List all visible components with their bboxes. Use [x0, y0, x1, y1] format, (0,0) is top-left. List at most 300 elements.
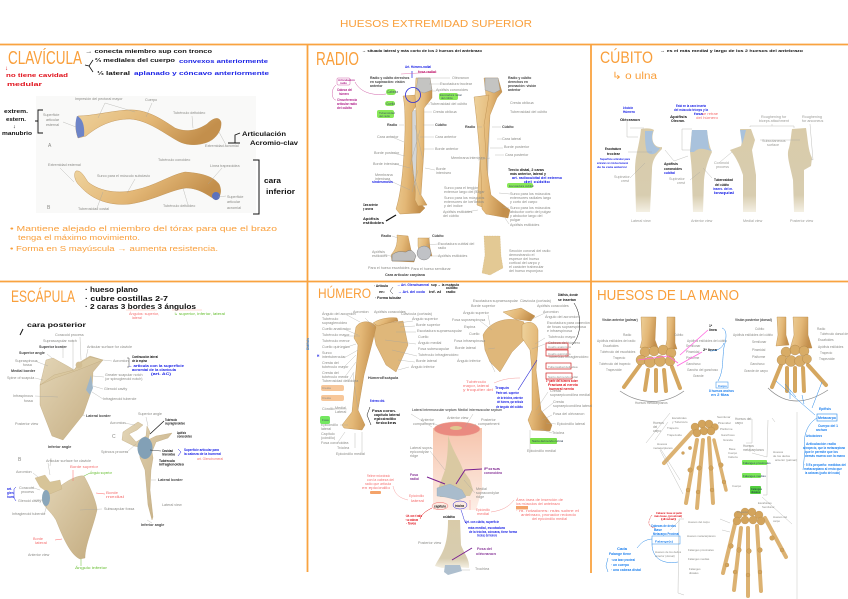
annotations: mano: Articulaciones: [806, 434, 822, 438]
annotations: húmero: · m. rotadores: más sobre el: [516, 508, 579, 513]
labels: mano: Radio: [623, 333, 632, 337]
bone: escápula anterior: [35, 475, 97, 559]
note: cara posterior: cara posterior: [27, 322, 87, 329]
annotations: húmero: tróclea: [455, 504, 464, 508]
labels: clavícula: B: [47, 205, 51, 211]
annotations: radio: [332, 65, 563, 225]
labels: escápula: Infraglenoid tubercle: [103, 397, 136, 401]
annotations: mano: línea: [709, 328, 717, 332]
labels: radio: Cara articular carpiana: [385, 273, 426, 277]
annotations: húmero: en epicóndilo: [362, 486, 390, 490]
annotations: húmero: epicóndilo: [374, 417, 397, 421]
annotations: húmero: Cuello anatómico: [548, 345, 572, 349]
labels: húmero: (cóndilo): [321, 436, 335, 440]
annotations: cúbito: Olecran.: [671, 118, 685, 123]
bones: húmero posterior y escápula: [483, 308, 552, 431]
labels: escápula: Inferior angle: [48, 445, 71, 449]
labels: mano: Semilunar: [752, 340, 767, 344]
annotations: mano: anchura: [816, 428, 827, 432]
annotations: radio: fosa radial: [418, 70, 436, 74]
labels: cúbito: Supinator: [614, 175, 631, 179]
labels: húmero: Cresta del: [322, 361, 339, 365]
labels: mano: Trapecio: [613, 356, 626, 360]
labels: mano: Pisiforme: [752, 355, 766, 359]
labels: húmero: Ángulo inferior: [457, 359, 482, 363]
labels: radio: Membrana interósea: [451, 156, 486, 160]
labels: mano: Huesos: [657, 442, 668, 446]
labels: clavícula: Extremidad acromial: [205, 144, 239, 148]
labels: cúbito: crest: [677, 181, 685, 185]
annotations: húmero: cúbito: [443, 515, 455, 519]
annotations: mano: 8 huesos anchos: [709, 389, 734, 393]
annotations: húmero: tróclea: [376, 421, 397, 425]
labels: escápula: Lateral border: [158, 478, 183, 482]
labels: escápula: Subscapular fossa: [104, 507, 135, 511]
labels: radio: Tuberosidad del cúbito: [510, 110, 547, 114]
annotations: escápula: glen: [7, 491, 14, 495]
labels: húmero: Escotadura supraescapular: [417, 329, 463, 333]
labels: radio: Para el hueso semilunar: [411, 267, 452, 271]
labels: húmero: Epicóndilo lateral: [557, 422, 585, 426]
notes: clavícula top: convexos anteriormente: [179, 59, 268, 65]
annotations: mano: [606, 324, 846, 572]
labels: mano: Falanges medias: [688, 557, 710, 561]
notes: clavícula orange: tenga el máximo movimiento.: [18, 235, 140, 242]
annotations: escápula: → articula con la superficie: [128, 364, 184, 368]
labels: clavícula: Extremidad esternal: [48, 163, 81, 167]
labels: radio: Cara lateral: [502, 137, 521, 141]
figure: mano dorsal: [723, 508, 786, 596]
labels: radio: Borde interóseo: [373, 162, 399, 166]
labels: mano: Trapezoide: [667, 433, 682, 437]
labels: mano: [597, 318, 848, 595]
notes: clavícula top: [85, 49, 269, 77]
annotations: húmero: Fosa: [322, 418, 329, 422]
annotations: mano: metacarpiano al resto que: [804, 467, 842, 471]
labels: radio: Apófisis estiloides: [438, 254, 467, 258]
labels: húmero: Acromion: [353, 310, 369, 314]
notes: escápula top: · 2 caras 3 bordes 3 ángulos: [85, 304, 196, 311]
labels: clavícula: Tubérculo deltoideo: [163, 204, 195, 208]
labels: escápula: Lateral border: [86, 414, 111, 418]
labels: húmero: Cuello anatómico: [322, 327, 350, 331]
labels: radio: Borde posterior: [504, 145, 530, 149]
annotations: radio: Cuello: [386, 102, 395, 106]
annotations: húmero: los músculos del antebrazo: [516, 501, 560, 506]
bone: clavícula A: [76, 110, 221, 145]
annotations: cúbito: Húmero: [623, 110, 635, 114]
annotations: escápula: [7, 354, 223, 570]
annotations: mano: · 5 Es pequeño: medidas del: [804, 463, 846, 467]
labels: cúbito: Roughening: [802, 115, 822, 119]
labels: cúbito: Anterior view: [691, 219, 713, 223]
labels: radio: y abductor largo del: [510, 214, 543, 218]
labels: cúbito: Subcutaneous: [762, 139, 786, 143]
labels: mano: Escafoides: [818, 338, 834, 342]
labels: radio: Apófisis estiloides: [510, 223, 539, 227]
labels: radio: Apófisis coronoides: [436, 88, 468, 92]
labels: clavícula: Línea trapezoidea: [210, 164, 240, 168]
subheading: o ulna: ↳ o ulna: [612, 71, 658, 82]
annotations: mano: Falanges medias: [743, 474, 766, 478]
labels: escápula: Acromion: [16, 470, 32, 474]
annotations: escápula: Tubérculo: [159, 459, 175, 463]
labels: radio: del hueso esponjoso: [509, 269, 543, 273]
labels: mano: Trapecio: [667, 426, 679, 430]
labels: radio: Cúbito: [502, 125, 514, 129]
labels: cúbito: process: [716, 165, 729, 169]
labels: radio: Sección coronal del radio: [509, 249, 550, 253]
annotations: húmero: Extremo dist.: [370, 399, 385, 403]
labels: mano: Trapezoide: [606, 368, 622, 372]
figure: sección del brazo y codo: [433, 422, 482, 510]
labels: húmero: Medial: [476, 487, 487, 491]
labels: escápula: Supraspinous: [15, 359, 38, 363]
labels: mano: Falanges: [689, 567, 701, 571]
annotations: clavícula black: inferior: [266, 189, 295, 196]
labels: radio: radio: [438, 246, 446, 250]
labels: húmero: Apófisis coracoides: [537, 304, 569, 308]
labels: mano: Trapecio: [737, 510, 748, 514]
annotations: húmero: Fosa: [484, 466, 501, 471]
labels: radio: Olécranon: [452, 76, 469, 80]
annotations: mano: la cabezas (puño del nudo): [805, 471, 840, 475]
labels: húmero: Apófisis coracoides: [374, 310, 406, 314]
figure background: clavícula: [36, 96, 256, 213]
notes: húmero top: · Forma tubular: [375, 295, 401, 300]
labels: húmero: Espina: [464, 325, 476, 329]
labels: húmero: Epicóndilo medial: [527, 449, 556, 453]
labels: húmero: Borde superior: [416, 323, 441, 327]
labels: escápula: Posterior view: [15, 422, 38, 426]
labels: cúbito: Medial view: [743, 219, 763, 223]
annotations: escápula: Borde: [106, 490, 118, 495]
labels: cúbito: Lateral view: [631, 219, 651, 223]
labels: mano: Semilunar: [686, 344, 701, 348]
notes: escápula top: Ángulos: superior,: [129, 312, 159, 316]
labels: escápula: Acromion: [113, 359, 129, 363]
notes: húmero top: → Art. Glenohumeral: [397, 283, 429, 287]
annotations: mano: en 2 filas: [711, 393, 729, 397]
labels: mano: Escafoides: [758, 501, 772, 505]
annotations: escápula: lateral: [35, 540, 47, 545]
annotations: escápula: de la espina: [132, 358, 148, 363]
annotations: clavícula black: extrem.: [4, 109, 29, 115]
labels: mano: Escafoides: [603, 344, 619, 348]
annotations: húmero: Surco del nervio radial: [548, 375, 578, 379]
labels: cúbito: Roughening for: [761, 115, 787, 119]
annotations: radio: Escotadura radial: [440, 93, 462, 97]
labels: radio: Cara anterior: [435, 135, 457, 139]
annotations: cúbito: fosa: [694, 112, 703, 116]
heading: húmero: HÚMERO: [318, 285, 371, 301]
annotations: radio: y convexa: [363, 206, 373, 211]
annotations: húmero: Surco del nervio cubital: [532, 439, 564, 443]
labels: clavícula: Superficie: [227, 195, 243, 199]
labels: mano: Cabeza: [728, 455, 738, 459]
annotations: escápula: Superficie articular para: [184, 448, 219, 452]
annotations: mano: 1ª: [709, 324, 713, 328]
panel: clavícula: [2, 48, 299, 253]
notes: clavícula orange: [10, 226, 277, 253]
annotations: mano: Base: [654, 528, 662, 532]
annotations: cúbito: Apófisis: [664, 161, 678, 166]
annotations: húmero: Cuello quirúrgico: [548, 352, 571, 356]
annotations: húmero: del epicóndilo medial: [532, 516, 567, 521]
notes: húmero top: inf. al: [429, 289, 441, 294]
labels: escápula: C: [112, 434, 116, 440]
annotations: radio: Art. Húmero-radial: [405, 65, 431, 69]
annotations: mano: (distal): [661, 517, 676, 521]
labels: escápula: Superior angle: [138, 412, 162, 416]
annotations: mano: · un cuerpo: [611, 563, 629, 567]
labels: húmero: supraepicondílea lateral: [553, 404, 592, 408]
labels: cúbito: crest: [621, 179, 629, 183]
notes: clavícula top: ⅔ mediales del cuerpo: [95, 58, 176, 64]
notes: húmero top: radio: [446, 289, 456, 294]
labels: escápula: Articular surface for clavicle: [46, 459, 91, 463]
labels: húmero: Borde lateral: [416, 359, 437, 363]
labels: mano: Huesos: [653, 421, 664, 425]
labels: radio: abductor corto del pulgar: [510, 210, 552, 214]
note: no tiene cavidad medular: medular: [7, 82, 43, 88]
figure: muñeca dorsal: [768, 317, 828, 401]
labels: mano: Huesos: [743, 444, 754, 448]
annotations: húmero: Área ósea de inserción de: [516, 497, 563, 502]
labels: mano: carpo: [773, 519, 780, 523]
labels: húmero: Cresta del: [322, 371, 339, 375]
annotations: húmero: radio que articula: [365, 482, 391, 486]
labels: radio: Borde anterior: [435, 147, 459, 151]
labels: húmero: ridge: [476, 495, 484, 499]
annotations: radio: Apófisis: [363, 216, 379, 221]
annotations: escápula: Cavidad: [162, 449, 173, 453]
annotations: cúbito: Tuberosidad: [714, 177, 734, 182]
labels: húmero: Escápula: [382, 376, 399, 380]
labels: mano: Trapezoide: [819, 357, 835, 361]
annotations: radio: Cabeza del: [337, 88, 352, 92]
labels: clavícula: articular: [46, 118, 60, 122]
labels: mano: Piramidal: [752, 348, 766, 352]
annotations: mano: Falanges proximales: [743, 461, 771, 465]
labels: radio: Para el hueso escafoides: [368, 266, 410, 270]
labels: radio: Radio: [381, 234, 392, 238]
labels: escápula: Acromion: [110, 421, 126, 425]
labels: mano: Visión posterior (dorsal): [735, 318, 772, 322]
labels: mano: Radio: [817, 327, 826, 331]
bone: clavícula B: [75, 171, 221, 204]
labels: mano: Cuerpo: [732, 484, 742, 488]
notes: húmero top: [374, 282, 460, 300]
labels: escápula: Glenoid cavity: [104, 387, 127, 391]
notes: escápula top: [85, 287, 225, 320]
annotations: radio: Cara anterior: [363, 202, 378, 207]
labels: húmero: [321, 299, 592, 571]
annotations: radio: art. radiocubital del extremo: [512, 175, 563, 180]
labels: escápula: Spine of scapula: [7, 376, 35, 380]
notes: clavícula top: aplanado y cóncavo anteriormente: [134, 71, 269, 77]
labels: cúbito: for anconeus: [802, 119, 823, 123]
annotations: cúbito: braquial: [714, 191, 734, 195]
labels: mano: y Tubérculo: [672, 420, 688, 424]
annotations: cúbito: Superficie articular para: [600, 157, 630, 161]
annotations: húmero: capítulo lateral: [374, 413, 400, 417]
annotations: radio: Escotadura cubital: [509, 184, 534, 188]
labels: húmero: Capítulo: [321, 432, 335, 436]
panel: huesos de la mano: [597, 287, 848, 599]
annotations: húmero: Epicóndilo: [476, 507, 490, 512]
annotations: cúbito: cubital: [664, 171, 675, 175]
annotations: radio: estiloides: [363, 220, 384, 225]
bone: sección del radio: [482, 236, 503, 275]
annotations: cúbito: articular con tróclea humeral: [597, 161, 628, 165]
labels: húmero: Tubérculo infraglenoideo: [418, 353, 458, 357]
labels: mano: del: [653, 425, 658, 429]
bones: cara articular carpiana: [391, 235, 432, 262]
labels: húmero: Ángulo del acromion: [322, 312, 356, 316]
labels: radio: en supinación: visión: [370, 80, 405, 84]
labels: mano: Grande: [693, 374, 704, 378]
annotations: húmero: Diáfisis: [306, 338, 310, 350]
annotations: cúbito: del cúbito: [715, 182, 729, 187]
labels: radio: Surco para los músculos: [444, 196, 485, 200]
annotations: mano: demás mueva con la mano: [805, 454, 845, 458]
labels: húmero: Tubérculo mayor: [322, 333, 350, 337]
labels: húmero: intertubercular: [322, 355, 346, 359]
labels: húmero: Tróclea: [552, 431, 565, 435]
labels: clavícula: [43, 97, 243, 211]
labels: cúbito: biceps attachment: [759, 119, 789, 123]
labels: mano: Ganchoso: [750, 362, 765, 366]
annotations: radio: sindesmosis: [372, 180, 393, 184]
annotations: escápula: Ángulo superior: [90, 470, 113, 475]
annotations: radio: articular radio: [337, 102, 358, 106]
annotations: clavícula black: manubrio: [2, 131, 33, 137]
annotations: cúbito: Olécranon: [620, 117, 641, 122]
note: radio top: → situado lateral y más corto de los 2 huesos del antebrazo: [362, 48, 483, 53]
labels: mano: Huesos de los dedos: [655, 550, 682, 554]
labels: radio: Cúbito: [432, 234, 444, 238]
labels: escápula: Articular surface for clavicle: [87, 345, 132, 349]
labels: húmero: Tubérculo mayor: [548, 335, 576, 339]
annotations: cúbito: del húmero: [696, 116, 718, 120]
notes: clavícula top: ⅓ lateral: [97, 71, 131, 77]
panel: escápula: [7, 287, 225, 570]
labels: clavícula: Tuberosidad costal: [78, 207, 109, 211]
annotations: húmero: troclear, del húmero: [477, 534, 497, 538]
panel: húmero: [306, 282, 592, 575]
annotations: húmero: con la cabeza del: [367, 478, 394, 482]
labels: mano: Trapecio: [820, 351, 833, 355]
labels: húmero: Fosa subescapular: [418, 347, 450, 351]
annotations: cúbito: inserc. del m.: [713, 187, 733, 191]
labels: húmero: Ángulo superior: [463, 311, 490, 315]
figure: mano palmar: [664, 420, 726, 508]
annotations: húmero: · fóvea: [406, 522, 416, 526]
labels: cúbito: Coronoid: [714, 161, 729, 165]
annotations: húmero: y troquíter del: [463, 388, 493, 392]
labels: mano: Cúbito: [755, 327, 764, 331]
labels: escápula: Glenoid cavity: [18, 499, 41, 503]
note: no tiene cavidad medular: [5, 66, 69, 88]
panel: radio: [316, 48, 563, 277]
labels: húmero: Epicóndilo medial: [336, 452, 365, 456]
labels: mano: Escafoides: [672, 416, 687, 420]
labels: húmero: Cabeza del húmero: [548, 341, 580, 345]
annotations: húmero: Fosa del: [477, 546, 492, 551]
labels: húmero: Posterior: [481, 418, 497, 422]
labels: húmero: Húmero: [368, 376, 383, 380]
notes: escápula top: ↳ superior, inferior, lateral: [174, 312, 225, 316]
labels: cúbito: [614, 115, 823, 223]
labels: radio: demostrando el: [509, 253, 535, 257]
labels: húmero: Ángulo del acromion: [545, 315, 579, 319]
labels: radio: extensores de los dedos: [444, 200, 484, 204]
annotations: radio: Articulación: [338, 78, 355, 82]
labels: húmero: Lateral intermuscular septum: [412, 408, 457, 412]
annotations: mano: que le permite que los: [805, 450, 838, 454]
labels: radio: Tuberosidad del cúbito: [430, 102, 467, 106]
labels: mano: carpo: [653, 429, 661, 433]
labels: clavícula: Impresión del pectoral mayor: [75, 97, 123, 101]
bone: escápula posterior: [40, 356, 103, 440]
labels: húmero: Clavícula (cortada): [520, 299, 551, 303]
labels: radio: derechos en: [508, 80, 528, 84]
labels: escápula: Lateral view: [162, 503, 182, 507]
labels: escápula: Infraspinous: [13, 394, 33, 398]
annotations: mano: Cabezas de dedos: [651, 524, 676, 528]
annotations: húmero: capítulo: [434, 504, 446, 508]
labels: escápula: fossa: [23, 363, 33, 367]
annotations: húmero: Troquín: [495, 386, 510, 390]
notes: húmero top: cúbito: [446, 285, 458, 290]
labels: húmero: Tuberosidad deltoidea: [322, 379, 359, 383]
labels: radio: cortical del carpo y: [509, 261, 540, 265]
labels: radio: Cresta oblicua: [433, 110, 458, 114]
labels: húmero: Tubérculo menor: [322, 339, 351, 343]
annotations: húmero: H: [317, 354, 320, 358]
annotations: escápula: Glenoidea: [162, 452, 175, 456]
labels: escápula: Infraglenoid tubercle: [12, 512, 45, 516]
annotations: escápula: infraglenoideo: [159, 462, 184, 466]
labels: mano: Tubérculo del escafoides: [600, 350, 636, 354]
annotations: húmero: · Art. con el radio: [405, 514, 422, 518]
labels: húmero: Ángulo superior: [412, 317, 439, 321]
annotations: radio: radio: [340, 81, 347, 85]
annotations: clavícula black: ↓: [13, 124, 16, 130]
labels: radio: Escotadura cubital del: [438, 242, 474, 246]
labels: húmero: Tróclea: [337, 446, 350, 450]
labels: húmero: Posterior view: [418, 541, 441, 545]
annotations: húmero: · su cabeza: [405, 518, 418, 522]
annotations: mano: Falange tiene: [609, 552, 631, 556]
labels: húmero: Medial intermuscular septum: [458, 408, 502, 412]
labels: radio: Surco para los músculos: [510, 206, 551, 210]
annotations: húmero: Cresta: [322, 396, 331, 400]
labels: escápula: process: [21, 490, 34, 494]
labels: mano: carpo: [735, 421, 743, 425]
labels: escápula: Greater scapular notch: [105, 373, 143, 377]
annotations: húmero: Relieve redondeado: [367, 474, 390, 478]
annotations: mano: · una base proximal: [611, 558, 635, 562]
labels: húmero: Fosa infraespinosa: [454, 339, 486, 343]
annotations: húmero: antebrazo, pronador redondo: [521, 512, 576, 517]
annotations: radio: más anterior, lateral y: [510, 171, 547, 176]
labels: mano: de los dedos: [773, 454, 791, 458]
labels: clavícula: articular: [227, 200, 241, 204]
annotations: escápula: art.: [7, 487, 12, 491]
labels: húmero: Cuello: [418, 335, 428, 339]
